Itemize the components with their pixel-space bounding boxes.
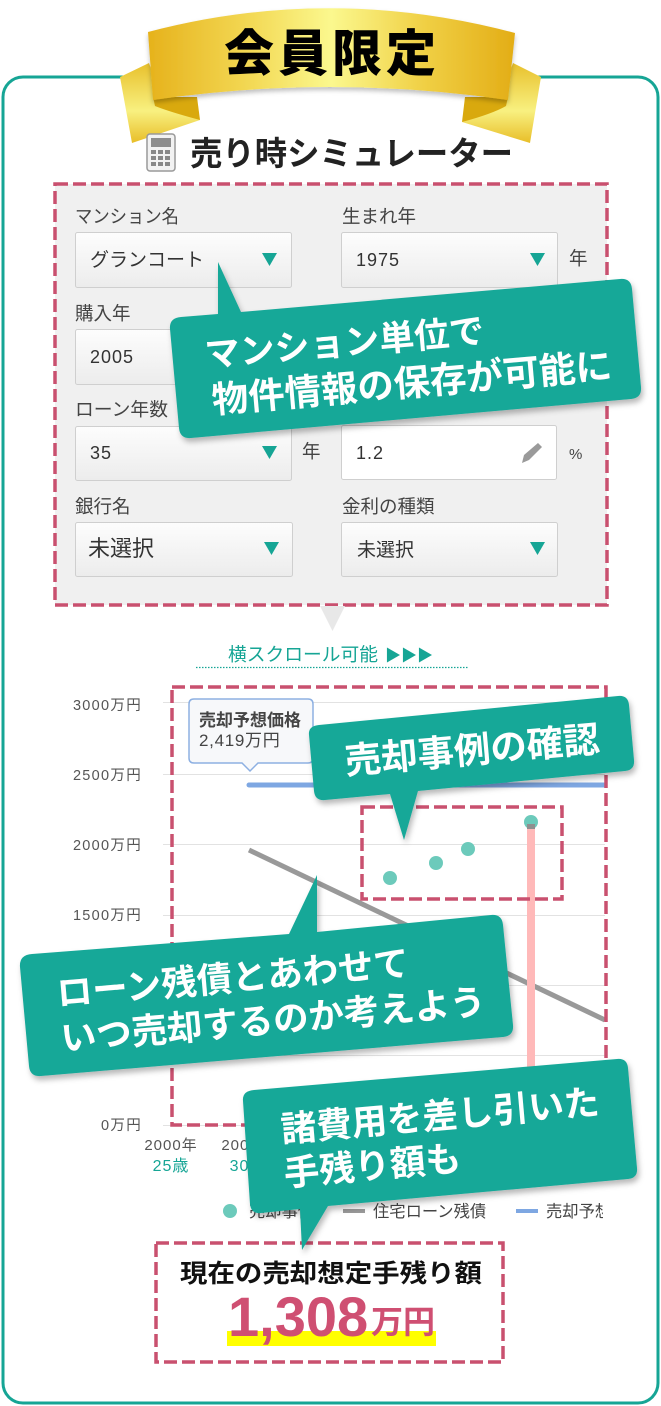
field: purchase year: 購入年	[75, 303, 131, 324]
highlight: net proceeds	[156, 1243, 503, 1362]
y axis labels	[73, 698, 142, 1134]
highlight: sale examples	[362, 807, 562, 899]
callout: loan balance: いつ売却するのか考えよう	[59, 974, 487, 1062]
ribbon main band	[148, 8, 515, 100]
field: interest rate: %	[569, 446, 582, 463]
field: birth year: 年	[569, 248, 588, 269]
chart	[73, 698, 644, 1221]
ribbon right tail	[462, 63, 541, 143]
field: mansion name: マンション名	[75, 206, 179, 227]
scroll hint	[196, 644, 468, 668]
scroll hint: 横スクロール可能	[228, 644, 378, 665]
field: loan years: 35	[90, 443, 112, 463]
field: rate type: 未選択	[357, 539, 414, 561]
field: loan years	[75, 399, 321, 480]
field: bank name	[75, 496, 292, 576]
field: bank name: 銀行名	[75, 496, 131, 517]
highlight: chart area	[172, 687, 606, 1125]
line: loan balance	[249, 850, 605, 1020]
badge title: 会員限定	[224, 14, 440, 86]
scroll hint: ▶▶▶	[385, 647, 433, 665]
callout: expenses: 諸費用を差し引いた	[279, 1074, 601, 1153]
gold ribbon badge	[120, 8, 541, 143]
ribbon left tail	[120, 63, 200, 143]
legend: 住宅ローン残債	[373, 1203, 486, 1221]
field: bank name: 未選択	[88, 536, 154, 561]
field: loan years: ローン年数	[75, 399, 168, 420]
x axis labels	[144, 1137, 275, 1175]
legend: 売却事例	[249, 1203, 314, 1221]
panel: form	[55, 184, 607, 605]
field: interest rate: 1.2	[356, 443, 384, 463]
field: interest rate	[342, 426, 582, 480]
x axis labels: 30歳	[230, 1157, 266, 1175]
result: net proceeds	[180, 1254, 482, 1348]
callout: save property info: マンション単位で	[203, 303, 486, 378]
callout: expenses: 手残り額も	[282, 1131, 463, 1197]
field: mansion name	[75, 206, 292, 288]
callout: loan balance: ローン残債とあわせて	[55, 935, 411, 1017]
sale example dots	[383, 815, 538, 885]
field: rate type	[342, 496, 558, 576]
y axis labels: 1500万円	[73, 908, 142, 924]
field: purchase year: 2005	[90, 347, 134, 367]
tooltip	[189, 699, 313, 771]
callout: loan balance	[20, 875, 513, 1076]
field: loan years: 年	[302, 441, 321, 462]
arrow: form to chart	[320, 606, 345, 631]
y axis labels: 2500万円	[73, 768, 142, 784]
field: mansion name: グランコート	[90, 249, 204, 271]
field: birth year	[342, 206, 588, 288]
result: net proceeds: 1,308	[228, 1285, 368, 1348]
x axis labels: 2000年	[144, 1137, 198, 1154]
callout: sale examples: 売却事例の確認	[342, 710, 601, 785]
callout: save property info: 物件情報の保存が可能に	[209, 336, 614, 424]
heading: simulator: 売り時シミュレーター	[190, 127, 513, 175]
result: net proceeds: 万円	[371, 1297, 435, 1343]
x axis labels: 25歳	[153, 1157, 189, 1175]
callout: expenses	[243, 1059, 637, 1250]
field: birth year: 生まれ年	[342, 206, 416, 227]
field: birth year: 1975	[356, 250, 400, 270]
result: net proceeds: 現在の売却想定手残り額	[180, 1254, 482, 1290]
tooltip: 2,419万円	[199, 731, 280, 750]
y axis labels: 0万円	[101, 1118, 142, 1134]
icon: calculator	[147, 134, 175, 171]
callout: sale examples	[309, 696, 634, 840]
net proceeds bar	[527, 825, 535, 1075]
y axis labels: 3000万円	[73, 698, 142, 714]
tooltip: 売却予想価格	[199, 710, 301, 730]
legend	[223, 1203, 644, 1221]
legend: 売却予想価格	[546, 1203, 644, 1221]
callout: save property info	[170, 262, 641, 438]
field: purchase year	[75, 303, 292, 384]
icon: pencil	[522, 443, 542, 463]
x axis labels: 2005年	[221, 1137, 275, 1154]
y axis labels: 2000万円	[73, 838, 142, 854]
line: expected sale price	[249, 782, 605, 788]
field: rate type: 金利の種類	[342, 496, 435, 517]
